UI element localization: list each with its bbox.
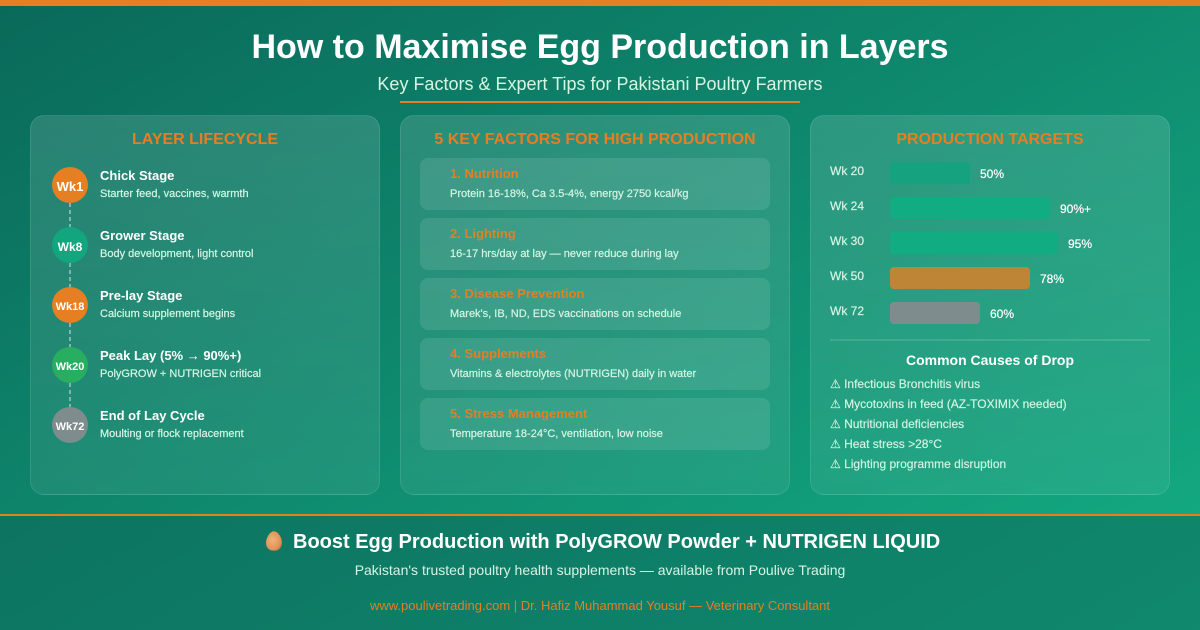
cause 4: ⚠ Heat stress >28°C [830,437,942,451]
factor 1 title: 1. Nutrition [450,166,519,181]
factor 3 detail: Marek's, IB, ND, EDS vaccinations on schedule [450,308,681,320]
panel: key factors [400,115,790,495]
cause 1: ⚠ Infectious Bronchitis virus [830,377,980,391]
stage: week 1 [52,167,249,203]
factor 4 title: 4. Supplements [450,346,546,361]
lifecycle heading: LAYER LIFECYCLE [132,131,278,148]
title: How to Maximise Egg Production in Layers [251,28,949,66]
stage: week 72 [52,407,244,443]
week 20 badge [52,347,88,383]
week 20 bar [890,162,970,184]
panel: layer lifecycle [30,115,380,495]
week 8 description: Body development, light control [100,248,253,260]
factor 1 detail: Protein 16-18%, Ca 3.5-4%, energy 2750 kcal/kg [450,188,688,200]
week 20 title: Peak Lay (5% → 90%+) [100,348,241,363]
week 24 bar [890,197,1050,219]
factor 5 detail: Temperature 18-24°C, ventilation, low noise [450,428,663,440]
icon: egg [266,531,282,551]
stage: week 8 [52,227,253,263]
footer band [0,514,1200,630]
week 72 badge: Wk72 [56,421,84,433]
week 1 title: Chick Stage [100,168,174,183]
week 72 bar [890,302,980,324]
call to action [266,531,940,553]
stage: week 18 [52,287,235,323]
cause 3: ⚠ Nutritional deficiencies [830,417,964,431]
week 72 description: Moulting or flock replacement [100,428,244,440]
subtitle: Key Factors & Expert Tips for Pakistani Poultry Farmers [377,74,823,94]
week 72 badge [52,407,88,443]
week 20 description: PolyGROW + NUTRIGEN critical [100,368,261,380]
week 18 title: Pre-lay Stage [100,288,182,303]
factor 5 title: 5. Stress Management [450,406,587,421]
causes heading: Common Causes of Drop [906,352,1074,368]
factor 2 detail: 16-17 hrs/day at lay — never reduce during lay [450,248,679,260]
key factors heading: 5 KEY FACTORS FOR HIGH PRODUCTION [434,131,756,148]
factor 3: disease prevention [420,278,770,330]
production targets heading: PRODUCTION TARGETS [896,131,1084,148]
week 20 badge: Wk20 [56,361,84,373]
week 72 label: Wk 72 [830,304,864,318]
week 50 label: Wk 50 [830,269,864,283]
week 30 bar [890,232,1058,254]
week 8 title: Grower Stage [100,228,185,243]
factor 4: supplements [420,338,770,390]
week 30 value: 95% [1068,237,1092,251]
bar chart [830,162,1092,324]
footer contact: www.poulivetrading.com | Dr. Hafiz Muhammad Yousuf — Veterinary Consultant [370,598,830,613]
week 8 badge [52,227,88,263]
week 50 value: 78% [1040,272,1064,286]
week 18 badge: Wk18 [56,301,84,313]
stage: week 20 [52,347,261,383]
call to action text: Boost Egg Production with PolyGROW Powder + NUTRIGEN LIQUID [293,531,940,553]
week 18 description: Calcium supplement begins [100,308,235,320]
week 20 label: Wk 20 [830,164,864,178]
factor 2: lighting [420,218,770,270]
factor 3 title: 3. Disease Prevention [450,286,584,301]
week 50 bar [890,267,1030,289]
week 18 badge [52,287,88,323]
week 8 badge: Wk8 [58,240,82,254]
week 72 title: End of Lay Cycle [100,408,205,423]
factor 2 title: 2. Lighting [450,226,516,241]
week 1 badge: Wk1 [57,179,83,194]
cause 5: ⚠ Lighting programme disruption [830,457,1006,471]
top accent bar [0,0,1200,6]
footer tagline: Pakistan's trusted poultry health supplements — available from Poulive Trading [355,562,845,578]
cause 2: ⚠ Mycotoxins in feed (AZ-TOXIMIX needed) [830,397,1067,411]
week 24 label: Wk 24 [830,199,864,213]
week 1 badge [52,167,88,203]
factor 5: stress management [420,398,770,450]
factor 4 detail: Vitamins & electrolytes (NUTRIGEN) daily in water [450,368,696,380]
week 30 label: Wk 30 [830,234,864,248]
panel: production targets [810,115,1170,495]
causes list [830,377,1067,471]
week 1 description: Starter feed, vaccines, warmth [100,188,249,200]
week 72 value: 60% [990,307,1014,321]
week 20 value: 50% [980,167,1004,181]
heading underline [400,101,800,103]
factor 1: nutrition [420,158,770,210]
week 24 value: 90%+ [1060,202,1091,216]
